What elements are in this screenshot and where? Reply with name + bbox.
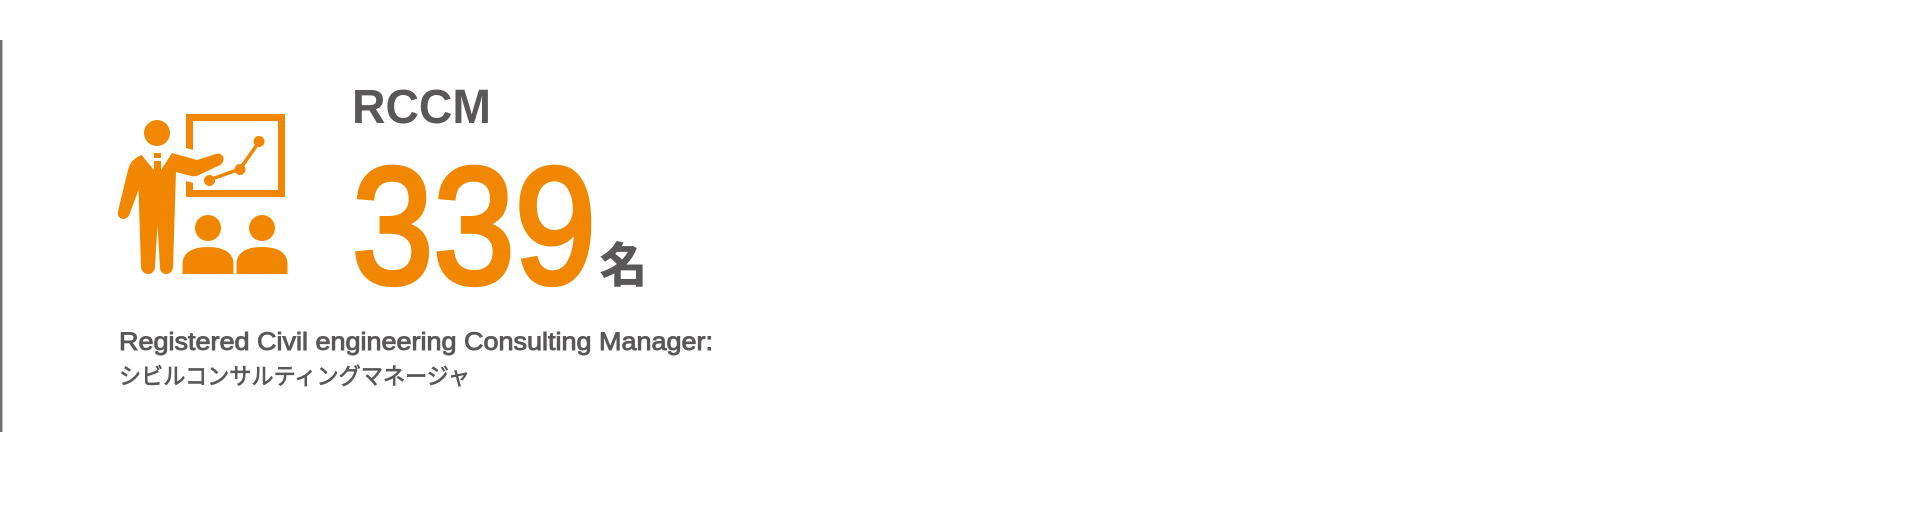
icon: chart line <box>204 136 264 186</box>
icon: audience member right <box>236 215 288 274</box>
description text <box>119 328 713 389</box>
description English line: Registered Civil engineering Consulting Manager: <box>119 328 713 356</box>
big number: 339: 339 <box>352 134 596 319</box>
icon: presentation board <box>186 114 285 197</box>
description Japanese line: シビルコンサルティングマネージャ <box>119 363 470 389</box>
icon: audience member left <box>182 215 234 274</box>
icon: presenter with chart and audience <box>118 114 288 274</box>
heading: RCCM: RCCM <box>352 81 491 134</box>
left divider line <box>0 40 2 432</box>
icon: presenter figure <box>118 120 224 274</box>
unit: 名: 名 <box>600 239 647 292</box>
